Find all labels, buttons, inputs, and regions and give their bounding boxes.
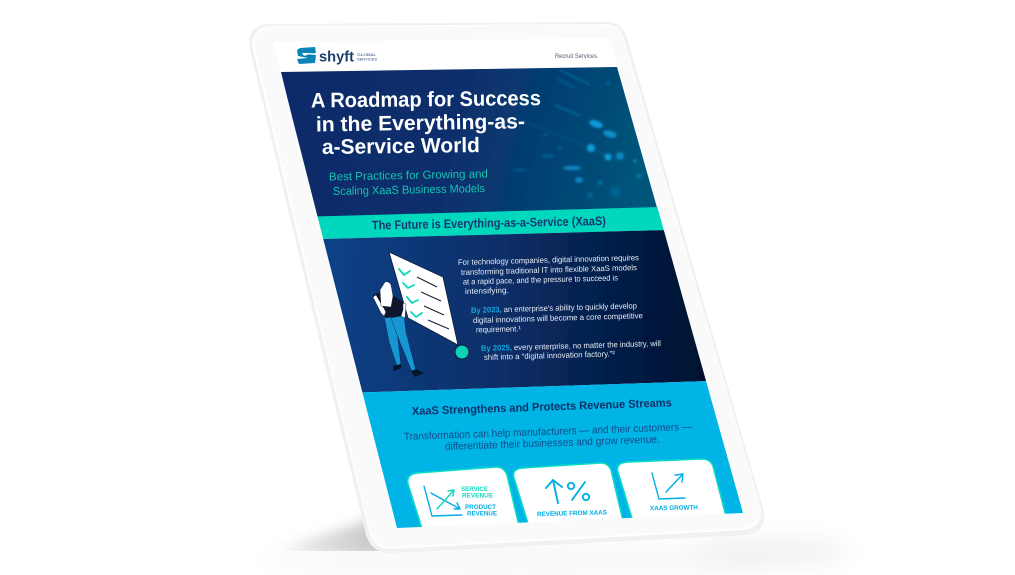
title: in the Everything-as- [316,110,525,136]
title: A Roadmap for Success [311,87,541,112]
icon: shyft mark [297,47,316,64]
revenue subtext: Transformation can help manufacturers — and their customers — [404,421,692,443]
paragraph: by 2023: digital innovations will become a core competitive [473,311,644,325]
revenue subtext [404,424,692,450]
tagline: GLOBAL [357,52,377,57]
tablet screen [273,38,760,535]
teal circle [455,345,469,359]
tablet [249,22,764,553]
title [312,91,540,154]
title: a-Service World [322,134,480,159]
tablet bezel [249,22,764,553]
checklist paper [389,252,458,345]
card: xaas growth [617,459,727,525]
tagline: SERVICES [357,56,377,62]
nav label: Recruit Services [555,53,598,60]
revenue cards [408,459,727,535]
label: xaas growth: XAAS GROWTH [650,504,698,512]
paragraph: by 2023: By 2023, an enterprise's ability to quickly develop [471,301,638,315]
paragraph: digital innovation: intensifying. [465,286,509,296]
paragraph: by 2025: shift into a “digital innovation factory.”² [484,349,615,362]
tagline [357,54,377,60]
card: revenue from xaas [513,463,624,530]
paragraph: by 2023: requirement.¹ [476,324,521,334]
label: product revenue: PRODUCT [465,504,496,511]
icon: crossing revenue chart [424,486,462,516]
illustration: woman with checklist [373,252,469,377]
panel: revenue section [360,381,760,529]
panel: header background [281,67,662,225]
logo [297,47,377,66]
ground shadow [290,516,824,568]
label: service revenue: SERVICE [461,486,489,493]
label: product revenue [465,504,497,516]
paragraph: digital innovation [458,253,639,296]
paragraph: digital innovation: transforming traditional IT into flexible XaaS models [461,263,637,277]
paragraph: by 2023 [471,301,644,334]
checkmarks [399,269,422,317]
label: product revenue: REVENUE [467,510,498,518]
intro text [458,253,661,362]
paragraph: by 2025 [481,340,660,360]
icon: up arrow and percent [546,480,589,503]
bokeh lights [512,70,642,198]
label: service revenue: REVENUE [462,492,494,500]
paragraph: digital innovation: at a rapid pace, and the pressure to succeed is [463,273,618,286]
paragraph: digital innovation: For technology companies, digital innovation requires [458,253,639,267]
label: revenue from xaas: REVENUE FROM XAAS [537,509,608,518]
person [373,282,424,377]
card: service and product revenue [407,466,519,527]
subtitle: Best Practices for Growing and [329,168,488,183]
subtitle [329,168,488,198]
panel: dark intro [322,230,708,392]
revenue heading: XaaS Strengthens and Protects Revenue Streams [412,397,672,418]
icon: growth chart [652,473,685,499]
revenue subtext: differentiate their businesses and grow revenue. [445,434,660,453]
paragraph: by 2025: By 2025, every enterprise, no matter the industry, will [481,339,661,353]
panel: future band [315,207,668,239]
band heading: The Future is Everything-as-a-Service (XaaS) [372,214,606,232]
label: service revenue [461,486,493,498]
checklist lines [417,277,449,329]
subtitle: Scaling XaaS Business Models [333,183,485,198]
wordmark: shyft [319,48,354,66]
